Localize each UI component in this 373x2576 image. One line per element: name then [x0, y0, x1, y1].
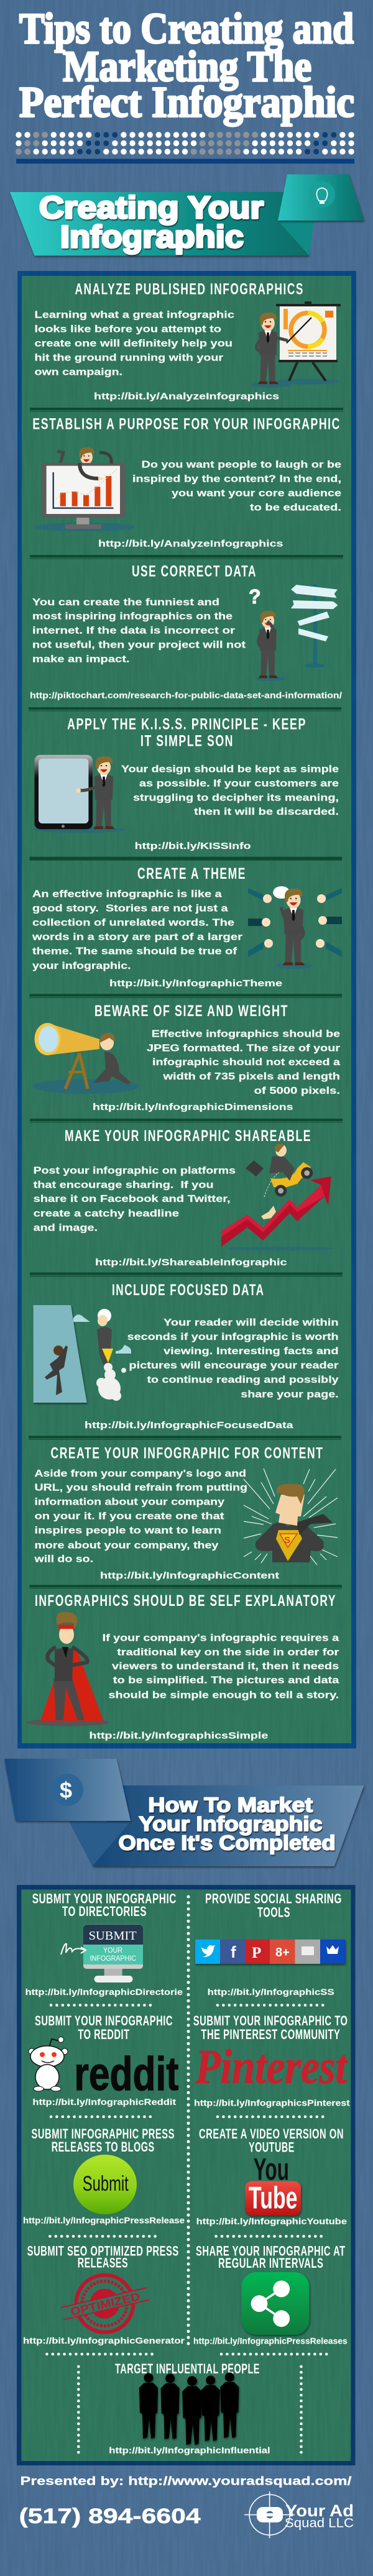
url: http://bit.ly/InfographicYoutube	[196, 2217, 348, 2226]
text block: internet. If the data is incorrect or	[32, 625, 235, 636]
icon: submit monitor	[61, 1925, 143, 1982]
text block: own campaign.	[35, 367, 122, 377]
text block: Do you want people to laugh or be	[142, 460, 341, 470]
logo: your ad squad: Squad LLC	[285, 2516, 354, 2531]
section: provide social sharing tools	[195, 1891, 345, 1997]
heading	[27, 2243, 179, 2271]
section: create a theme	[32, 865, 342, 989]
text block: infographic should not exceed a	[152, 1057, 340, 1068]
text block	[34, 1166, 236, 1233]
url: http://bit.ly/InfographicsSimple	[90, 1730, 268, 1741]
heading: SUBMIT YOUR INFOGRAPHIC	[35, 2013, 173, 2028]
text block: your infographic.	[32, 961, 131, 971]
url: http://bit.ly/InfographicReddit	[32, 2097, 177, 2107]
text block	[34, 1469, 247, 1565]
text block: collection of unrelated words. The	[32, 918, 234, 928]
heading: TO REDDIT	[78, 2027, 129, 2042]
text block: Effective infographics should be	[152, 1029, 340, 1039]
text block: create a catchy headline	[34, 1209, 179, 1219]
ribbon band	[10, 192, 309, 255]
section: make your infographic shareable	[34, 1127, 334, 1268]
url: http://bit.ly/InfographicDimensions	[93, 1102, 293, 1112]
logo: your ad squad	[244, 2491, 354, 2538]
illustration: confused man and signpost: ?	[249, 585, 261, 608]
text block: of 5000 pixels.	[254, 1086, 340, 1096]
text block: viewers to understand it, then it needs	[112, 1661, 339, 1672]
illustration: superhero man opening his shirt: S	[284, 1535, 290, 1546]
illustration: man looking through a telescope	[32, 1023, 139, 1094]
text block: Your reader will decide within	[163, 1318, 339, 1328]
heading: TARGET INFLUENTIAL PEOPLE	[115, 2361, 260, 2377]
url: http://bit.ly/InfographicPressRelease	[23, 2216, 185, 2225]
heading: USE CORRECT DATA	[132, 563, 257, 580]
ribbon fold	[279, 221, 314, 255]
heading	[193, 2013, 348, 2042]
section: include focused data	[34, 1281, 339, 1431]
heading	[32, 1891, 177, 1919]
text block: Your design should be kept as simple	[121, 764, 339, 774]
logo: pinterest: Pinterest	[195, 2040, 348, 2094]
icon: submit button: Submit	[83, 2172, 129, 2196]
footer: phone number: (517) 894-6604	[19, 2505, 201, 2528]
text block	[147, 1029, 340, 1096]
logo: your ad squad: Your Ad	[285, 2501, 354, 2520]
text block: to be educated.	[250, 502, 341, 513]
heading	[196, 2243, 346, 2271]
section: use correct data	[30, 563, 342, 700]
heading: INCLUDE FOCUSED DATA	[112, 1281, 265, 1299]
text block: then it will be discarded.	[194, 807, 339, 817]
section: kiss principle	[33, 716, 339, 851]
panel: creating tips	[17, 271, 356, 1749]
section: target influential people	[109, 2361, 270, 2455]
icons: social sharing buttons: f	[231, 1943, 236, 1961]
icons: social sharing buttons: 8+	[275, 1946, 290, 1960]
heading: IT SIMPLE SON	[140, 733, 234, 750]
heading: TO DIRECTORIES	[62, 1904, 147, 1919]
section: submit press releases to blogs	[23, 2126, 185, 2225]
section: beware of size and weight	[32, 1002, 340, 1112]
text block: make an impact.	[32, 654, 129, 665]
heading	[205, 1891, 342, 1920]
logo: youtube: Tube	[249, 2181, 297, 2216]
text block	[32, 889, 242, 971]
heading: BEWARE OF SIZE AND WEIGHT	[94, 1002, 288, 1020]
logo: reddit: reddit	[74, 2048, 178, 2101]
illustration: man hugging a tablet	[33, 755, 126, 833]
icons: social sharing buttons	[195, 1940, 345, 1964]
heading	[67, 716, 306, 750]
text block: not useful, then your project will not	[32, 640, 246, 651]
panel: marketing tips	[17, 1885, 356, 2465]
text block: to be simplified. The pictures and data	[113, 1675, 339, 1686]
ribbon heading: Once It's Completed	[119, 1831, 336, 1854]
text block: seconds if your infographic is worth	[127, 1332, 339, 1342]
text block: pictures will encourage your reader	[129, 1360, 339, 1371]
text block: to continue reading and possibly	[147, 1375, 339, 1385]
illustration: man leaning over monitor with bar chart	[34, 447, 135, 531]
url: http://bit.ly/AnalyzeInfographics	[98, 539, 283, 549]
heading: REGULAR INTERVALS	[218, 2255, 323, 2271]
illustration: confused man and signpost	[249, 584, 338, 681]
text block: more about your company, they	[35, 1540, 219, 1551]
text block: Learning what a great infographic	[35, 309, 234, 321]
illustration: man presenting a chart	[251, 301, 341, 388]
heading: SUBMIT YOUR INFOGRAPHIC	[32, 1891, 177, 1907]
section: submit to directories	[25, 1891, 183, 1997]
url: http://bit.ly/InfographicGenerator	[23, 2336, 185, 2345]
section: share at regular intervals	[193, 2243, 348, 2346]
section: submit to reddit	[29, 2013, 178, 2107]
url: http://bit.ly/KISSInfo	[135, 841, 251, 851]
heading: SUBMIT SEO OPTIMIZED PRESS	[27, 2243, 179, 2258]
text block: inspired by the content? In the end,	[132, 474, 341, 485]
text block	[32, 597, 246, 665]
heading	[199, 2126, 344, 2155]
url: http://bit.ly/InfographicPressReleases	[193, 2337, 348, 2346]
ribbon heading	[39, 190, 264, 254]
url: http://bit.ly/InfographicTheme	[109, 978, 282, 989]
ribbon heading: Creating Your	[39, 190, 264, 225]
icon: submit monitor: YOUR	[103, 1946, 122, 1955]
text block: hit the ground running with your	[35, 352, 223, 363]
text block: on your it. If you create one that	[35, 1511, 224, 1522]
text block: Aside from your company's logo and	[35, 1469, 246, 1479]
text block: share it on Facebook and Twitter,	[34, 1194, 231, 1204]
text block: good story. Stories are not just a	[32, 904, 228, 914]
text block: JPEG formatted. The size of your	[147, 1043, 340, 1053]
text block: viewing. Interesting facts and	[163, 1346, 339, 1357]
ribbon flag	[278, 174, 364, 221]
text block: most inspiring infographics on the	[32, 612, 233, 622]
dot pattern	[19, 135, 352, 152]
title: Perfect Infographic	[19, 78, 354, 127]
icon: light bulb	[309, 181, 335, 208]
text block: will do so.	[34, 1554, 93, 1565]
text block	[103, 1633, 339, 1700]
url: http://bit.ly/ShareableInfographic	[95, 1257, 287, 1268]
url: http://piktochart.com/research-for-public-data-set-and-information/	[30, 691, 342, 700]
section: create your infographic for content	[34, 1445, 338, 1581]
section: establish a purpose	[32, 416, 341, 549]
text block: that encourage sharing. If you	[34, 1180, 214, 1191]
icon: optimized stamp	[61, 2275, 150, 2332]
logo: youtube	[245, 2152, 301, 2216]
text block: information about your company	[35, 1497, 224, 1508]
text block: you want your core audience	[172, 488, 341, 498]
text block: theme. The same should be true of	[32, 946, 237, 957]
heading: YOUTUBE	[249, 2140, 295, 2155]
ribbon band	[92, 1785, 364, 1866]
heading: RELEASES	[78, 2255, 128, 2271]
icon: submit monitor: SUBMIT	[89, 1929, 137, 1943]
text block: create one will definitely help you	[35, 338, 233, 349]
icon: group of silhouettes	[139, 2373, 239, 2445]
ribbon heading: Your Infographic	[139, 1812, 322, 1835]
icons: social sharing buttons: P	[252, 1945, 261, 1961]
url: http://bit.ly/InfographicInfluential	[109, 2446, 270, 2455]
icon: submit monitor: INFOGRAPHIC	[90, 1954, 136, 1963]
text block: as possible. If your customers are	[139, 779, 339, 789]
ribbon: how to market	[4, 1759, 364, 1866]
url: http://bit.ly/InfographicsPinterest	[194, 2098, 350, 2107]
url: http://bit.ly/InfographicFocusedData	[85, 1420, 293, 1431]
heading	[35, 2013, 173, 2042]
ribbon: creating your infographic	[10, 174, 364, 255]
title: Marketing The	[63, 43, 311, 91]
url: http://bit.ly/InfographicSS	[208, 1987, 334, 1997]
text block: If your company's infographic requires a	[103, 1633, 339, 1644]
logo: reddit	[29, 2037, 178, 2101]
text block	[132, 460, 341, 513]
text block: An effective infographic is like a	[32, 889, 222, 900]
url: http://bit.ly/AnalyzeInfographics	[94, 391, 279, 401]
illustration: man on scooter riding a rising arrow	[221, 1144, 334, 1250]
text block: share your page.	[241, 1389, 339, 1400]
text block	[127, 1318, 339, 1400]
url: http://bit.ly/InfographicContent	[100, 1570, 279, 1581]
logo: youtube: You	[254, 2152, 289, 2187]
text block: words in a story are part of a larger	[32, 932, 242, 942]
illustration: jetpack man passing a climber	[34, 1305, 131, 1403]
ribbon flag	[4, 1759, 131, 1821]
icon: submit button	[73, 2155, 137, 2214]
text block	[121, 764, 339, 817]
text block: looks like before you attempt to	[35, 324, 221, 334]
text block: Post your infographic on platforms	[34, 1166, 236, 1176]
text block: traditional key on the side in order for	[117, 1648, 339, 1658]
text block: struggling to decipher its meaning,	[133, 792, 339, 803]
footer: presented by: Presented by: http://www.youradsquad.com/	[20, 2475, 352, 2488]
heading	[31, 2126, 175, 2155]
title	[19, 5, 354, 127]
heading: TOOLS	[257, 1904, 290, 1920]
text block: width of 735 pixels and length	[162, 1071, 340, 1082]
icon: dollar sign: $	[60, 1777, 72, 1803]
section: infographics should be self explanatory	[26, 1592, 339, 1741]
illustration: superhero man opening his shirt	[244, 1469, 338, 1565]
heading: RELEASES TO BLOGS	[52, 2139, 155, 2155]
icon: optimized stamp: OPTIMIZED	[69, 2290, 141, 2318]
text block: URL, you should refrain from putting	[35, 1483, 247, 1493]
heading: SUBMIT INFOGRAPHIC PRESS	[31, 2126, 175, 2142]
section: analyze published infographics	[35, 280, 341, 401]
text block	[35, 309, 234, 377]
heading: CREATE A THEME	[137, 865, 246, 882]
text block: and image.	[34, 1223, 98, 1233]
ribbon heading: Infographic	[60, 219, 244, 254]
section: submit to pinterest	[193, 2013, 350, 2107]
section: create a youtube video	[196, 2126, 348, 2226]
url: http://bit.ly/InfographicDirectorie	[25, 1987, 183, 1997]
text block: You can create the funniest and	[32, 597, 219, 608]
section: submit seo optimized press releases	[23, 2243, 185, 2345]
ribbon heading: How To Market	[148, 1793, 313, 1816]
ribbon fold	[69, 1822, 131, 1866]
icon: share button	[241, 2272, 310, 2335]
text block: inspires people to want to learn	[35, 1526, 221, 1536]
icon: dollar sign	[51, 1774, 83, 1806]
illustration: man with thumbs up and down	[248, 886, 342, 969]
text block: should be simple enough to tell a story.	[108, 1690, 339, 1700]
ribbon heading	[119, 1793, 336, 1854]
illustration: caped superhero man	[26, 1612, 109, 1726]
